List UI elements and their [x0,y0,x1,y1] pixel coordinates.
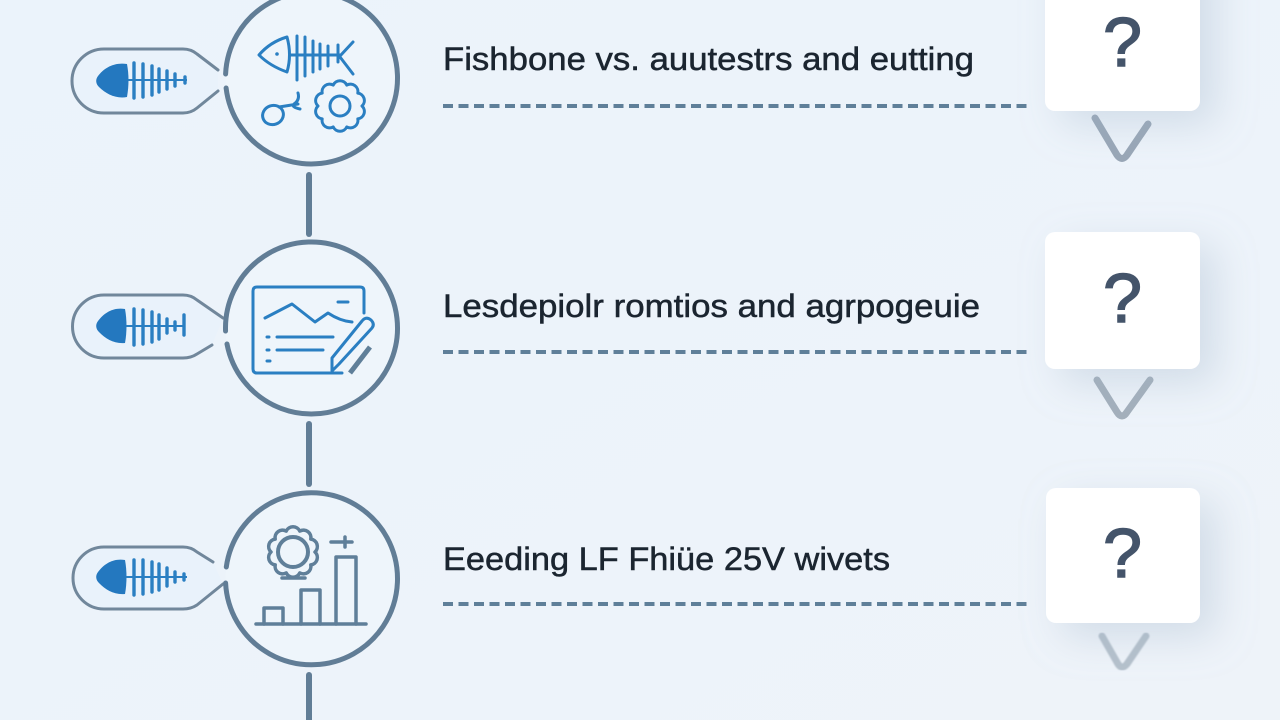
dashed rule 1 [443,104,1030,108]
question mark 3: ? [1103,514,1142,592]
pill: fishbone badge 3 [73,547,223,609]
icon: fish skeleton [259,36,353,80]
dashed rule 3 [443,602,1030,606]
heading 1: Fishbone vs. auutestrs and eutting [443,41,974,77]
question mark 1: ? [1103,3,1142,81]
card 1 [1045,0,1200,111]
row 2 [73,242,1030,414]
chevron 3 [1102,636,1146,667]
card 3 [1046,488,1200,623]
icon: gear with ribbon [269,527,317,578]
icon: rising bar chart [256,537,366,624]
row 1 [72,0,1030,164]
connector: row 1 to row 2 [306,175,312,234]
chevron 1 [1095,118,1148,158]
row 3 [73,493,1030,665]
connector: row 3 downward [306,675,312,720]
step circle 3 [226,493,398,665]
heading 3: Eeeding LF Fhiüe 25V wivets [443,541,890,577]
icon: chart document with pen [253,287,373,373]
connector: row 2 to row 3 [306,424,312,484]
pill: fishbone badge 2 [73,295,223,358]
question mark 2: ? [1103,259,1142,337]
card 2 [1045,232,1200,369]
chevron 2 [1097,380,1150,416]
pill: fishbone badge 1 [72,49,218,113]
heading 2: Lesdepiolr romtios and agrpogeuie [443,288,980,324]
step circle 1 [226,0,398,164]
dashed rule 2 [443,350,1030,354]
icon: small wrench loop [260,93,300,128]
icon: gear [316,81,364,131]
step circle 2 [225,242,398,414]
